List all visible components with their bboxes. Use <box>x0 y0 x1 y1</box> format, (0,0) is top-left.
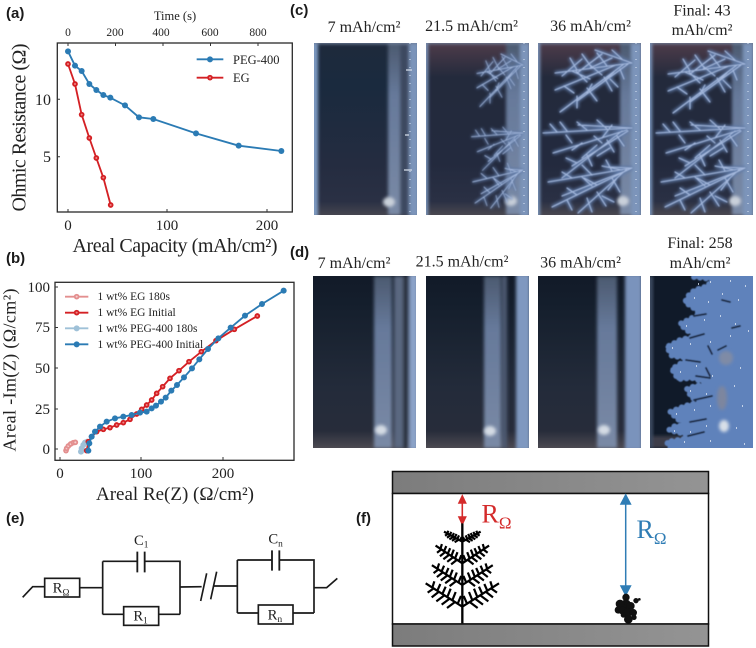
y tick labels: 0 <box>42 442 50 458</box>
grey and bright patches <box>719 351 733 365</box>
label C1: C <box>134 533 144 549</box>
label Rn: n <box>277 615 282 625</box>
axis ticks <box>57 43 267 212</box>
label R ohm: Ω <box>62 588 69 598</box>
label Cn: n <box>278 539 283 549</box>
wiring <box>23 560 337 614</box>
blue R omega label: R <box>636 515 654 544</box>
left axis labels: 10 <box>35 92 51 109</box>
legend text <box>233 53 280 85</box>
EG 180s curve <box>66 442 75 451</box>
x axis title: Areal Capacity (mAh/cm²) <box>72 235 278 257</box>
y axis title: Areal -Im(Z) (Ω/cm²) <box>0 288 20 452</box>
dendrites <box>471 54 523 208</box>
PEG-400 initial curve <box>88 291 284 451</box>
capacitor C1 <box>137 552 145 572</box>
panel c captions: 36 mAh/cm² <box>550 18 631 35</box>
panel e: equivalent circuit <box>23 532 337 626</box>
x tick labels: 200 <box>212 466 234 482</box>
panel d captions: 21.5 mAh/cm² <box>416 254 509 271</box>
label Rn: R <box>268 607 277 623</box>
photo d1: 7 mAh/cm2 <box>313 274 418 450</box>
resistor R1 <box>124 607 159 625</box>
series <box>65 291 284 452</box>
dark gaps <box>686 300 740 436</box>
left axis labels: 5 <box>43 149 51 166</box>
sparkles <box>672 281 749 444</box>
photo d4: final 258 mAh/cm2 <box>648 274 755 448</box>
legend text: EG <box>233 71 250 85</box>
top axis title: Time (s) <box>154 9 196 23</box>
panel c captions: 21.5 mAh/cm² <box>425 18 518 35</box>
EG curve <box>68 64 111 205</box>
panel d captions <box>318 235 733 272</box>
panel label c: (c) <box>290 2 308 19</box>
data series <box>68 51 281 205</box>
top electrode <box>392 472 708 494</box>
panel c captions: mAh/cm² <box>672 22 733 39</box>
axes frame <box>57 43 292 212</box>
red R omega label: Ω <box>499 514 511 533</box>
electrode deposit <box>622 276 628 448</box>
photo d2: 21.5 mAh/cm2 <box>426 274 530 450</box>
legend text: 1 wt% PEG-400 180s <box>98 323 198 335</box>
mossy deposit <box>615 594 641 624</box>
panel b: Nyquist plot <box>0 280 294 505</box>
top axis labels: 200 <box>106 27 124 39</box>
axes frame <box>55 282 294 460</box>
label R1: 1 <box>143 616 148 626</box>
panel a: ohmic resistance line chart <box>8 9 292 257</box>
capacitor Cn <box>272 550 279 571</box>
label R1: R <box>133 609 143 625</box>
legend swatch EG <box>197 75 223 80</box>
photo c4: final 43 mAh/cm2 <box>648 39 754 217</box>
legend text <box>98 291 203 351</box>
photo d3: 36 mAh/cm2 <box>538 274 642 450</box>
dendrites <box>543 50 632 213</box>
x tick labels: 100 <box>130 466 152 482</box>
legend text: PEG-400 <box>233 53 280 67</box>
panel c captions <box>328 2 733 39</box>
PEG-400 curve <box>68 51 281 151</box>
top axis labels: 800 <box>249 27 267 39</box>
top axis labels: 0 <box>65 27 71 39</box>
left axis labels <box>35 92 51 166</box>
dendrites underlay <box>656 51 745 213</box>
resistor R ohm <box>45 578 80 597</box>
y tick labels: 100 <box>28 280 50 296</box>
blue R omega label: Ω <box>654 529 666 548</box>
long dendrite tree <box>426 523 499 623</box>
bottom axis labels: 0 <box>64 218 72 234</box>
photo c1: 7 mAh/cm2 <box>312 39 419 217</box>
y tick labels: 50 <box>35 361 50 377</box>
y tick labels: 25 <box>35 402 50 418</box>
panel label a: (a) <box>6 5 24 22</box>
break marks <box>201 572 217 601</box>
panel d captions: Final: 258 <box>667 235 733 252</box>
electrode deposit <box>515 276 518 448</box>
red distance arrow <box>459 496 466 524</box>
panel label d: (d) <box>290 244 309 261</box>
dendrites <box>656 51 745 213</box>
panel label f: (f) <box>356 510 371 527</box>
legend swatches <box>65 297 88 344</box>
panel c captions: Final: 43 <box>673 2 731 20</box>
legend swatch PEG-400 <box>197 57 223 62</box>
panel f: dendrite schematic <box>392 472 708 646</box>
panel d captions: 7 mAh/cm² <box>318 255 391 272</box>
bottom axis labels <box>64 218 278 234</box>
bottom axis labels: 100 <box>156 218 178 234</box>
bottom electrode <box>392 624 708 646</box>
label R ohm: R <box>53 581 62 597</box>
photo c3: 36 mAh/cm2 <box>536 39 642 217</box>
panel label b: (b) <box>6 250 25 267</box>
resistor Rn <box>258 605 293 624</box>
dendrite mass <box>667 274 755 448</box>
y tick labels: 75 <box>35 320 50 336</box>
panel d captions: 36 mAh/cm² <box>540 255 621 272</box>
top axis labels: 600 <box>201 27 219 39</box>
dendrites underlay <box>471 54 523 208</box>
x axis title: Areal Re(Z) (Ω/cm²) <box>96 484 254 505</box>
top axis labels <box>65 27 267 39</box>
legend text: 1 wt% EG 180s <box>98 291 171 303</box>
blue distance arrow <box>621 495 630 595</box>
cell body <box>392 494 708 624</box>
label C1: 1 <box>144 541 149 551</box>
axis ticks <box>55 287 223 460</box>
y tick labels <box>28 280 50 458</box>
x tick labels <box>56 466 234 482</box>
panel label e: (e) <box>6 510 24 527</box>
red R omega label: R <box>482 500 499 529</box>
legend text: 1 wt% PEG-400 Initial <box>98 339 203 351</box>
legend text: 1 wt% EG Initial <box>98 307 176 319</box>
dendrites underlay <box>543 50 632 213</box>
y axis title: Ohmic Resistance (Ω) <box>8 44 30 212</box>
bottom axis labels: 200 <box>256 218 278 234</box>
label Cn: C <box>268 532 278 548</box>
top axis labels: 400 <box>152 27 170 39</box>
panel c captions: 7 mAh/cm² <box>328 19 401 36</box>
EG initial curve <box>87 316 257 451</box>
photo c2: 21.5 mAh/cm2 <box>424 39 530 217</box>
x tick labels: 0 <box>56 466 64 482</box>
panel d captions: mAh/cm² <box>670 255 731 272</box>
PEG-400 180s curve <box>81 442 87 452</box>
